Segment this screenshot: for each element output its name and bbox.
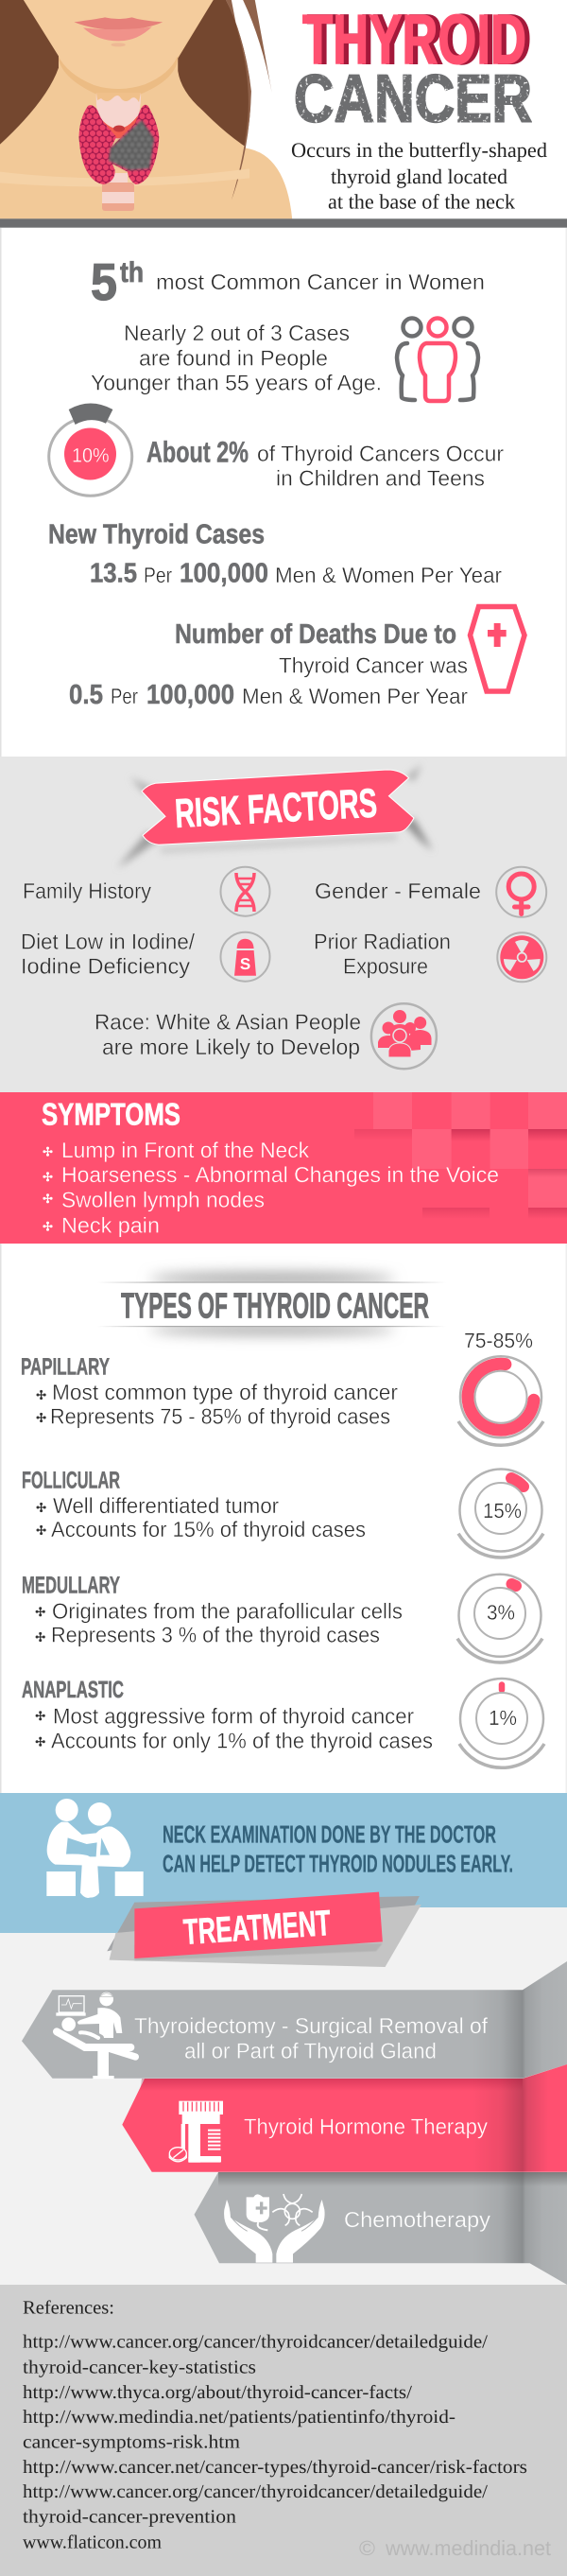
- text: thyroidectomy: [134, 2013, 489, 2063]
- arrow: hormone therapy: [122, 2064, 567, 2172]
- stat: new thyroid cases: 100,000: [180, 559, 268, 589]
- stat: deaths: Men & Women Per Year: [242, 684, 468, 708]
- arrow: thyroidectomy: [22, 1961, 567, 2079]
- text: references list: www.flaticon.com: [23, 2532, 162, 2552]
- chart: anaplastic donut 1%: [459, 1679, 544, 1767]
- risk: diet low in iodine: Iodine Deficiency: [21, 953, 191, 978]
- risk: race: Race: White & Asian People: [94, 1009, 361, 1034]
- text: references list: http://www.thyca.org/about/thyroid-cancer-facts/: [23, 2382, 412, 2403]
- icon: coffin: [471, 607, 524, 691]
- chart: medullary donut 3%: [457, 1575, 542, 1662]
- icon: doctor examining patient: [46, 1799, 144, 1898]
- icon: surgery: [56, 1993, 135, 2079]
- type: anaplastic: [22, 1677, 433, 1752]
- symptom list: Neck pain: [61, 1212, 160, 1237]
- symptom list: Swollen lymph nodes: [61, 1188, 265, 1212]
- panel: risk factors: [0, 757, 567, 1092]
- stat: new thyroid cases: Men & Women Per Year: [275, 563, 502, 587]
- text: thyroidectomy: Thyroidectomy - Surgical Removal of: [134, 2013, 489, 2038]
- watermark: www.medindia.net: [385, 2536, 551, 2560]
- callout: neck examination text: [163, 1819, 513, 1877]
- risk: race: [94, 1009, 361, 1059]
- type: papillary: Represents 75 - 85% of thyroid cases: [50, 1404, 390, 1429]
- panel: types of thyroid cancer: [0, 1244, 567, 1793]
- panel: key statistics: [0, 228, 567, 757]
- stat: deaths: Thyroid Cancer was: [279, 653, 468, 678]
- icon: 10 percent gauge: [49, 403, 132, 496]
- chart: follicular donut 15%: 15%: [483, 1499, 522, 1523]
- stat: two of three cases: are found in People: [139, 346, 328, 371]
- stat: new thyroid cases: [48, 519, 502, 589]
- text: references list: [23, 2298, 527, 2552]
- stat: deaths: [69, 619, 468, 710]
- icon: salt shaker: [221, 932, 270, 982]
- risk: gender: Gender - Female: [315, 879, 481, 903]
- subtitle: at the base of the neck: [328, 190, 515, 214]
- stat: children and teens: About 2%: [146, 435, 249, 468]
- type: anaplastic: Accounts for only 1% of the thyroid cases: [51, 1728, 433, 1752]
- stat: fifth most common: most Common Cancer in Women: [156, 270, 485, 294]
- risk: diet low in iodine: Diet Low in Iodine/: [21, 929, 196, 953]
- stat: children and teens: of Thyroid Cancers Occur: [257, 441, 504, 465]
- text: references list: http://www.cancer.org/cancer/thyroidcancer/detailedguide/: [23, 2332, 488, 2353]
- text: references list: http://www.cancer.net/cancer-types/thyroid-cancer/risk-factors: [23, 2457, 527, 2478]
- text: references list: http://www.medindia.net/patients/patientinfo/thyroid-: [23, 2407, 455, 2428]
- stat: fifth most common: [91, 252, 485, 311]
- ribbon heading: risk factors: [117, 764, 433, 868]
- panel: symptoms: [0, 1092, 567, 1244]
- subtitle: thyroid gland located: [331, 165, 507, 188]
- type: anaplastic: Most aggressive form of thyroid cancer: [53, 1703, 414, 1728]
- panel: treatment: [0, 1892, 567, 2285]
- type: follicular: Accounts for 15% of thyroid cases: [51, 1517, 366, 1541]
- stat: children and teens: [146, 435, 504, 490]
- chart: follicular donut 15%: [458, 1470, 543, 1558]
- panel: neck examination: [0, 1793, 567, 1933]
- heading: types of thyroid cancer: [57, 1272, 501, 1335]
- heading: treatment banner: TREATMENT: [182, 1904, 332, 1953]
- chart: papillary donut 75-85%: 75-85%: [464, 1329, 533, 1352]
- type: medullary: Represents 3 % of the thyroid cases: [51, 1623, 380, 1647]
- type: follicular: FOLLICULAR: [22, 1467, 120, 1493]
- text: references list: thyroid-cancer-prevention: [23, 2507, 236, 2528]
- icon: three people: [397, 318, 478, 401]
- subtitle: Occurs in the butterfly-shaped: [291, 138, 547, 162]
- panel: header illustration of neck and face: [0, 0, 292, 218]
- stat: fifth most common: 5: [91, 252, 117, 311]
- text: references list: References:: [23, 2298, 114, 2319]
- text: references list: cancer-symptoms-risk.htm: [23, 2432, 240, 2453]
- type: anaplastic: ANAPLASTIC: [22, 1677, 124, 1703]
- heading: treatment banner: [107, 1892, 421, 1967]
- panel: references: [0, 2285, 567, 2576]
- stat: deaths: Per: [111, 684, 138, 708]
- text: references list: thyroid-cancer-key-statistics: [23, 2357, 256, 2377]
- risk: race: are more Likely to Develop: [102, 1035, 360, 1059]
- chart: anaplastic donut 1%: 1%: [489, 1706, 517, 1730]
- type: medullary: Originates from the parafollicular cells: [52, 1599, 403, 1624]
- ribbon heading: risk factors: RISK FACTORS: [174, 780, 378, 837]
- type: papillary: Most common type of thyroid cancer: [52, 1380, 398, 1404]
- stat: new thyroid cases: New Thyroid Cases: [48, 519, 265, 549]
- stat: fifth most common: th: [120, 257, 144, 288]
- stat: new thyroid cases: Per: [144, 563, 172, 587]
- symptom list: Hoarseness - Abnormal Changes in the Voice: [61, 1162, 499, 1187]
- chart: papillary donut 75-85%: [458, 1329, 543, 1445]
- text: hormone therapy: Thyroid Hormone Therapy: [244, 2115, 488, 2139]
- text: thyroidectomy: all or Part of Thyroid Gland: [184, 2039, 437, 2063]
- icon: female symbol: [496, 867, 546, 917]
- stat: children and teens: in Children and Teens: [276, 465, 485, 490]
- stat: new thyroid cases: 13.5: [90, 559, 137, 589]
- stat: two of three cases: [91, 321, 382, 395]
- icon: salt shaker: S: [240, 955, 250, 973]
- risk: prior radiation: Prior Radiation: [314, 929, 451, 953]
- icon: 10 percent gauge: 10%: [72, 444, 110, 466]
- stat: deaths: 0.5: [69, 680, 103, 710]
- type: follicular: Well differentiated tumor: [53, 1493, 279, 1518]
- symptom list: Lump in Front of the Neck: [61, 1138, 309, 1162]
- symptom list: [43, 1138, 499, 1237]
- chart: medullary donut 3%: 3%: [487, 1601, 515, 1625]
- text: chemotherapy: Chemotherapy: [344, 2207, 491, 2232]
- type: medullary: [22, 1572, 403, 1647]
- risk: diet low in iodine: [21, 929, 196, 978]
- stat: deaths: 100,000: [146, 680, 234, 710]
- icon: radiation: [497, 932, 546, 982]
- risk: family history: Family History: [23, 879, 151, 903]
- header divider bar: [0, 218, 567, 228]
- risk: prior radiation: Exposure: [343, 953, 428, 978]
- watermark: ©: [359, 2536, 375, 2560]
- heading: symptoms: SYMPTOMS: [42, 1096, 180, 1131]
- stat: deaths: Number of Deaths Due to: [175, 619, 456, 650]
- icon: DNA: [221, 867, 270, 916]
- stat: two of three cases: Younger than 55 years of Age.: [91, 371, 382, 395]
- risk: prior radiation: [314, 929, 451, 978]
- icon: pill bottle: [169, 2101, 223, 2163]
- arrow: chemotherapy: [195, 2172, 567, 2285]
- icon: crowd of people: [371, 1003, 437, 1069]
- type: papillary: [21, 1353, 398, 1429]
- type: papillary: PAPILLARY: [21, 1353, 110, 1380]
- type: follicular: [22, 1467, 366, 1541]
- icon: hands with iv bag and biohazard: [224, 2194, 325, 2263]
- stat: two of three cases: Nearly 2 out of 3 Cases: [124, 321, 350, 345]
- type: medullary: MEDULLARY: [22, 1572, 120, 1598]
- text: references list: http://www.cancer.org/cancer/thyroidcancer/detailedguide/: [23, 2481, 488, 2502]
- subtitle: [291, 138, 547, 214]
